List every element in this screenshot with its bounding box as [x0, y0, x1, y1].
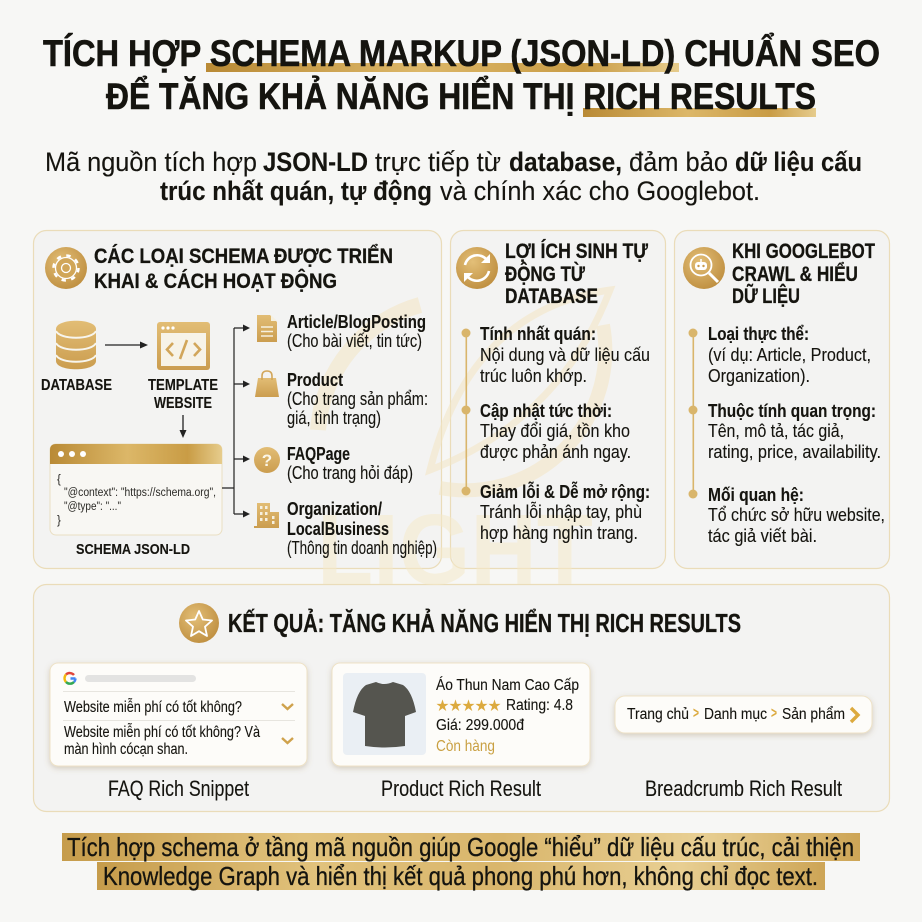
fact: relationships: [708, 484, 885, 546]
fact: relationships: Mối quan hệ:: [708, 484, 804, 505]
title: ĐỂ TĂNG KHẢ NĂNG HIỂN THỊ RICH RESULTS: [106, 75, 816, 117]
label: schema json-ld: SCHEMA JSON-LD: [76, 541, 190, 558]
item: organization: Organization/: [287, 498, 382, 519]
card: product result: Giá: 299.000đ: [436, 717, 524, 734]
item: organization: (Thông tin doanh nghiệp): [287, 537, 437, 558]
subtitle: và chính xác cho Googlebot.: [440, 176, 760, 206]
card: breadcrumb: >: [693, 705, 699, 722]
benefit: consistency: [480, 323, 650, 386]
label: template website: WEBSITE: [154, 395, 212, 412]
code window: schema json-ld: }: [57, 515, 61, 527]
card: product result: ★★★★★: [436, 698, 501, 713]
label: template website: TEMPLATE: [148, 377, 218, 394]
code window: schema json-ld: [50, 444, 222, 535]
subtitle: Mã nguồn tích hợp: [45, 147, 257, 177]
card: breadcrumb: Trang chủ: [627, 706, 689, 723]
item: product: Product: [287, 369, 343, 390]
icon: robot magnifier: [683, 247, 725, 289]
panel heading: DATABASE: [505, 284, 598, 308]
card: product result: Còn hàng: [436, 738, 495, 755]
watermark logo: [317, 290, 610, 606]
fact: key attributes: Tên, mô tả, tác giả,: [708, 420, 844, 441]
subtitle: trực tiếp từ: [375, 147, 501, 177]
footer callout: Knowledge Graph và hiển thị kết quả phong phú hơn, không chỉ đọc text.: [103, 861, 818, 891]
icon: database: [56, 321, 96, 369]
label: faq rich snippet: FAQ Rich Snippet: [108, 776, 250, 801]
panel: googlebot: [683, 239, 885, 546]
panel backgrounds: [34, 230, 890, 812]
item: article: Article/BlogPosting: [287, 311, 426, 332]
timeline: [688, 328, 698, 498]
fact: key attributes: rating, price, availability.: [708, 441, 881, 462]
item: article: (Cho bài viết, tin tức): [287, 330, 422, 351]
item: product: giá, tình trạng): [287, 407, 381, 428]
icon: t-shirt: [353, 682, 416, 748]
item: faq page: [254, 443, 413, 483]
timeline: [462, 328, 470, 496]
footer callout: [62, 832, 860, 891]
code window: schema json-ld: {: [57, 474, 61, 486]
panel heading: [505, 238, 648, 308]
panel heading: LỢI ÍCH SINH TỰ: [505, 238, 648, 263]
panel heading: [94, 243, 393, 293]
item: product: [255, 369, 428, 428]
benefit: consistency: trúc luôn khớp.: [480, 365, 587, 386]
arrow: database to template: [105, 342, 148, 348]
panel heading: KHI GOOGLEBOT: [732, 239, 875, 263]
connector arrows: [222, 324, 250, 518]
label: breadcrumb rich result: Breadcrumb Rich Result: [645, 776, 843, 801]
fact: key attributes: [708, 400, 881, 462]
fact: entity type: (ví dụ: Article, Product,: [708, 344, 871, 365]
benefit: fewer errors: Tránh lỗi nhập tay, phù: [480, 501, 642, 522]
panel: schema types: [41, 243, 437, 558]
benefit: instant update: Cập nhật tức thời:: [480, 400, 612, 421]
subtitle: trúc nhất quán, tự động: [160, 176, 432, 206]
item: article: [257, 311, 426, 351]
item: organization: [254, 498, 437, 558]
panel: results: [50, 603, 872, 801]
title: [43, 32, 880, 117]
icon: refresh: [456, 247, 498, 289]
card: breadcrumb: Danh mục: [704, 706, 767, 723]
panel heading: CÁC LOẠI SCHEMA ĐƯỢC TRIỂN: [94, 243, 393, 268]
benefit: fewer errors: [480, 481, 650, 543]
subtitle: [45, 147, 862, 206]
panel heading: ĐỘNG TỪ: [505, 261, 585, 286]
panel heading: CRAWL & HIỂU: [732, 261, 858, 286]
card: faq snippet: [50, 663, 307, 766]
item: organization: LocalBusiness: [287, 518, 389, 539]
code window: schema json-ld: "@type": "...": [64, 501, 121, 513]
item: faq page: FAQPage: [287, 443, 350, 464]
card: product result: Áo Thun Nam Cao Cấp: [436, 677, 579, 694]
label: template website: [148, 377, 218, 412]
subtitle: dữ liệu cấu: [735, 147, 862, 177]
subtitle: database,: [509, 147, 622, 177]
subtitle: JSON-LD: [263, 147, 368, 177]
fact: relationships: tác giả viết bài.: [708, 525, 817, 546]
fact: relationships: Tổ chức sở hữu website,: [708, 504, 885, 525]
benefit: instant update: được phản ánh ngay.: [480, 441, 631, 462]
item: faq page: ?: [262, 451, 272, 470]
benefit: consistency: Nội dung và dữ liệu cấu: [480, 344, 650, 365]
benefit: fewer errors: hợp hàng nghìn trang.: [480, 522, 638, 543]
card: faq snippet: màn hình cócạn shan.: [64, 741, 188, 758]
subtitle: đảm bảo: [629, 147, 728, 177]
results heading: KẾT QUẢ: TĂNG KHẢ NĂNG HIỂN THỊ RICH RESULTS: [228, 608, 741, 638]
fact: entity type: [708, 323, 871, 386]
fact: entity type: Organization).: [708, 365, 810, 386]
icon: google g: [65, 673, 76, 684]
panel: benefits: [456, 238, 650, 543]
arrow: template to schema: [180, 415, 186, 438]
icon: gear: [45, 247, 87, 289]
card: product result: [332, 663, 590, 766]
icon: template window: [157, 322, 210, 370]
label: database: DATABASE: [41, 377, 112, 394]
fact: key attributes: Thuộc tính quan trọng:: [708, 400, 876, 421]
benefit: instant update: [480, 400, 631, 462]
card: breadcrumb: Sản phẩm: [782, 706, 845, 723]
icon: star: [179, 603, 219, 643]
fact: entity type: Loại thực thể:: [708, 323, 809, 344]
benefit: consistency: Tính nhất quán:: [480, 323, 596, 344]
card: faq snippet: Website miễn phí có tốt không?: [64, 699, 242, 716]
panel heading: [732, 239, 875, 308]
item: faq page: (Cho trang hỏi đáp): [287, 462, 413, 483]
card: faq snippet: Website miễn phí có tốt không? Và: [64, 724, 260, 741]
benefit: instant update: Thay đổi giá, tồn kho: [480, 420, 630, 441]
code window: schema json-ld: "@context": "https://schema.org",: [64, 487, 216, 499]
card: product result: Rating: 4.8: [506, 697, 573, 714]
panel heading: KHAI & CÁCH HOẠT ĐỘNG: [94, 268, 337, 293]
label: product rich result: Product Rich Result: [381, 776, 542, 801]
watermark logo: LIGHT: [317, 494, 593, 606]
benefit: fewer errors: Giảm lỗi & Dễ mở rộng:: [480, 481, 650, 502]
item: product: (Cho trang sản phẩm:: [287, 388, 428, 409]
panel heading: DỮ LIỆU: [732, 283, 800, 308]
card: breadcrumb: >: [771, 705, 777, 722]
card: breadcrumb: [615, 696, 872, 733]
